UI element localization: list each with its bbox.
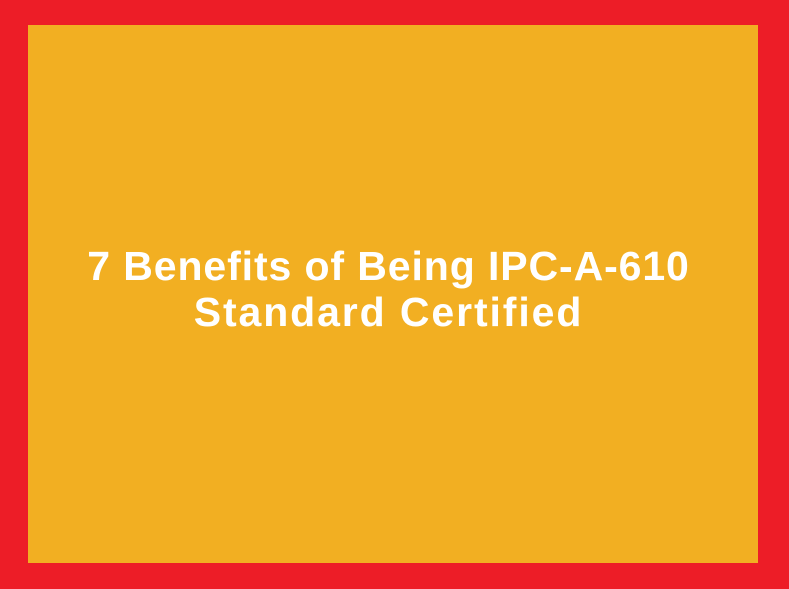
title: Standard Certified — [194, 289, 583, 335]
title: 7 Benefits of Being IPC-A-610 — [87, 243, 690, 289]
title — [87, 243, 690, 335]
